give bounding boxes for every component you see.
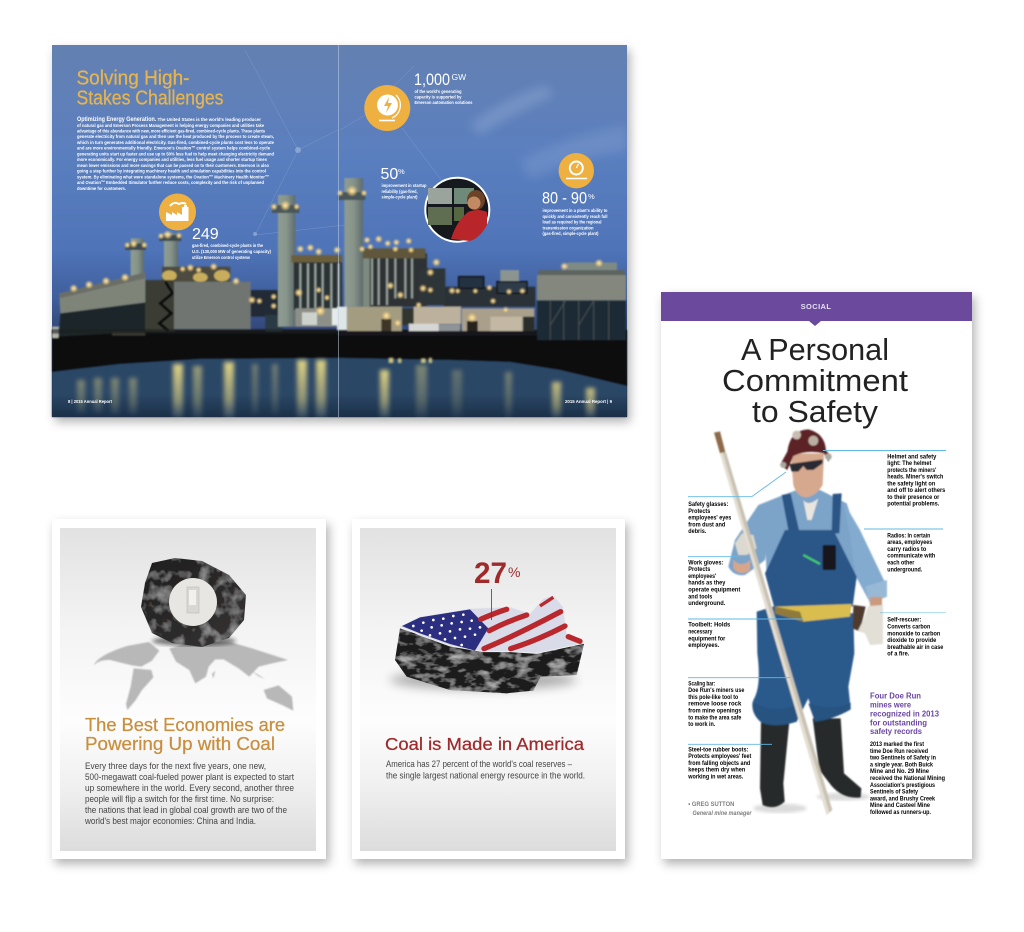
body text: optimizing energy generation: going a step further by integrating machinery health and simulation capabilities into the control [77, 169, 267, 175]
callout: self-rescuer: Self-rescuer: [887, 617, 921, 624]
stat: 1,000 GW [414, 70, 473, 106]
callout: scaling bar: to make the area safe [688, 714, 742, 721]
callout: work gloves: underground. [688, 600, 726, 607]
body text: optimizing energy generation: of natural gas and Emerson Process Management is helping energy companies and utilities take [77, 123, 264, 129]
callout: safety glasses: debris. [688, 528, 707, 535]
card sheet [352, 519, 625, 859]
attribution: • GREG SUTTON [688, 801, 735, 808]
callout: scaling bar: Scaling bar: [688, 680, 715, 687]
photo: miner with scaling bar [714, 429, 887, 815]
callout: safety glasses [688, 501, 732, 535]
callout: scaling bar: remove loose rock [688, 701, 742, 708]
stat: 1,000 GW: Emerson automation solutions [414, 100, 473, 106]
title: Solving High- [76, 68, 190, 90]
callout: self-rescuer [887, 617, 944, 658]
sidebar body text: Sentinels of Safety [870, 789, 918, 796]
body text: 500-megawatt coal-fueled power plant is expected to start [85, 772, 294, 782]
heading: Powering Up with Coal [85, 734, 275, 754]
sidebar body text: Association's prestigious [870, 782, 935, 789]
callout: self-rescuer: Converts carbon [887, 624, 930, 630]
sidebar body text: a single year. Both Buick [870, 761, 933, 768]
callout: work gloves: Work gloves: [688, 559, 723, 566]
callout: scaling bar [688, 680, 745, 728]
panel: coal is made in america card [352, 519, 625, 859]
stat: 249: 249 [192, 226, 219, 243]
stat: 1,000 GW: GW [452, 72, 466, 82]
body text: the nations that lead in global coal growth are two of the [85, 805, 287, 815]
body text: optimizing energy generation [76, 117, 275, 192]
body text: America has 27 percent of the world's coal reserves – [386, 759, 573, 769]
callout: toolbelt: necessary [688, 628, 713, 636]
callout: radios: carry radios to [887, 546, 926, 553]
panel: best economies card [52, 519, 326, 859]
sidebar body text: time Doe Run received [870, 748, 928, 755]
fold line [338, 45, 340, 417]
callout: radios: Radios: In certain [887, 532, 930, 539]
callout: helmet and safety light: Helmet and safety [887, 453, 937, 460]
coal lump shadow [152, 636, 236, 646]
header band [661, 292, 972, 326]
sidebar body text: followed as runners-up. [870, 809, 931, 816]
title: A Personal [741, 332, 889, 367]
callout: safety glasses: employees' eyes [688, 515, 732, 522]
icon: globe with lightning [364, 85, 410, 131]
callout: toolbelt: Toolbelt: Holds [688, 622, 731, 629]
icon: factory [159, 194, 196, 230]
callout: steel-toe rubber boots [687, 746, 752, 780]
stat: 50%: simple-cycle plant) [382, 195, 418, 201]
stat: 249: utilize Emerson control systems [192, 255, 250, 261]
sidebar body text: Mine and No. 29 Mine [870, 768, 929, 775]
callout: safety glasses: Safety glasses: [688, 501, 728, 508]
callout: steel-toe rubber boots: Steel-toe rubber boots: [688, 746, 748, 753]
callout: scaling bar: to work in. [688, 721, 716, 728]
stat: 50%: % [398, 167, 405, 176]
heading: Coal is Made in America [385, 734, 584, 754]
sidebar body text: received the National Mining [870, 775, 945, 782]
title: Commitment [722, 363, 908, 398]
stat: 80 - 90%: % [588, 192, 595, 201]
body text: people will flip a switch for the first time. No surprise: [85, 794, 274, 804]
stat: 27% [474, 557, 520, 620]
stat: 80 - 90%: transmission organization [542, 225, 594, 231]
sidebar body text: Mine and Casteel Mine [870, 802, 930, 809]
callout: self-rescuer: of a fire. [887, 651, 910, 658]
ground and water [52, 330, 627, 417]
callout: radios: areas, employees [887, 539, 933, 546]
stat: 50% [380, 166, 427, 201]
title: Stakes Challenges [76, 88, 224, 110]
body text: optimizing energy generation: system. By eliminating what were standalone systems, the Ovation™ Machinery Health Monitor™ [77, 174, 269, 180]
callout: radios: each other [887, 560, 915, 566]
callout: work gloves: employees' [688, 573, 717, 580]
stat: 27%: 27 [474, 557, 507, 590]
stat: 80 - 90% [542, 189, 608, 237]
callout leader lines [688, 450, 946, 744]
body text: optimizing energy generation: mean lower emissions and more savings that can be passed on to their customers. Emerson is also [77, 163, 269, 169]
purple subheading [870, 691, 940, 736]
body text: up somewhere in the world. Every second, another three [85, 783, 294, 793]
body text: optimizing energy generation: generating units start up faster and use up to 50% less fuel to help meet changing electricity demand [77, 151, 274, 157]
body text: optimizing energy generation: advantage of this abundance with new, more efficient gas-fired, combined-cycle plants. These plants [77, 128, 265, 134]
body text: optimizing energy generation: and Ovation™ Embedded Simulator further reduce costs, complexity and the risk of unplanned [77, 180, 264, 186]
purple subheading: Four Doe Run [870, 691, 921, 700]
callout: radios: underground. [887, 566, 923, 573]
callout: safety glasses: from dust and [688, 521, 725, 528]
callout: helmet and safety light: and off to alert others [887, 487, 946, 494]
page footer left: 8 | 2015 Annual Report [68, 399, 112, 405]
callout: self-rescuer: monoxide to carbon [887, 630, 940, 637]
attribution [688, 801, 752, 817]
sidebar body text: two Sentinels of Safety in [870, 755, 936, 762]
body text: optimizing energy generation: downtime for customers. [77, 186, 127, 192]
callout: helmet and safety light: light: The helmet [887, 460, 932, 467]
coal lump [141, 558, 246, 647]
stat: 1,000 GW: 1,000 [414, 70, 450, 89]
sidebar body text [870, 741, 945, 816]
callout: scaling bar: Doe Run's miners use [688, 687, 745, 694]
plant right half [337, 178, 626, 363]
panel: personal commitment to safety [661, 292, 972, 859]
callout: steel-toe rubber boots: from falling objects and [688, 760, 750, 767]
sidebar body text: award, and Brushy Creek [870, 795, 935, 802]
stat: 80 - 90%: quickly and consistently reach full [542, 214, 608, 220]
callout: work gloves: and tools [688, 593, 713, 600]
callout: self-rescuer: breathable air in case [887, 644, 944, 651]
purple subheading: safety records [870, 727, 923, 736]
spread background photo [52, 45, 627, 417]
stat: 80 - 90%: improvement in a plant's ability to [542, 208, 608, 214]
sky wisps and network lines [245, 50, 627, 236]
callout: helmet and safety light [887, 453, 946, 508]
light switch [169, 578, 217, 626]
page footer right: 2015 Annual Report | 9 [565, 399, 612, 405]
page sheet [661, 292, 972, 859]
coal america map [390, 595, 584, 693]
stat: 80 - 90%: 80 - 90 [542, 189, 587, 207]
callout: self-rescuer: dioxide to provide [887, 637, 937, 644]
stat: 1,000 GW: capacity is supported by [414, 95, 462, 101]
callout: toolbelt: equipment for [688, 635, 726, 642]
title: to Safety [752, 394, 879, 429]
body text: optimizing energy generation: which in turn generates additional electricity. Gas-fired, combined-cycle plants cost less to operate [76, 140, 274, 146]
stat: 1,000 GW: of the world's generating [414, 89, 462, 95]
callout: toolbelt: employees. [688, 642, 720, 649]
callout: toolbelt [688, 622, 731, 649]
callout: helmet and safety light: potential problems. [887, 500, 940, 508]
callout: work gloves: hands as they [688, 580, 726, 587]
stat: 80 - 90%: load as required by the regional [542, 220, 602, 226]
callout: helmet and safety light: to their presence or [887, 494, 940, 501]
body text: the single largest national energy resource in the world. [386, 770, 585, 780]
callout: work gloves: operate equipment [688, 586, 741, 594]
body text [386, 759, 585, 780]
body text: optimizing energy generation: and are more environmentally friendly. Emerson's Ovation™ control system helps combined-cycle [77, 146, 270, 152]
stat: 80 - 90%: (gas-fired, simple-cycle plant) [542, 231, 599, 237]
world map [94, 641, 293, 711]
body text: Every three days for the next five years, one new, [85, 761, 266, 771]
stat: 27%: % [508, 564, 520, 580]
callout: helmet and safety light: protects the miners' [887, 467, 937, 474]
callout: work gloves: Protects [688, 566, 711, 573]
body text: world's best major economies: China and India. [84, 816, 256, 826]
header band: SOCIAL [801, 302, 831, 311]
callout: radios [887, 532, 935, 573]
stat: 50%: improvement in startup [382, 183, 427, 189]
icon: gauge [559, 153, 594, 188]
plant left half [52, 195, 342, 338]
stat: 249: U.S. (130,000 MW of generating capacity) [192, 249, 271, 255]
stat: 249 [192, 226, 271, 261]
purple subheading: for outstanding [870, 719, 927, 728]
photo: operator at screens [425, 178, 489, 242]
callout: helmet and safety light: the safety light on [887, 480, 935, 487]
callout: safety glasses: Protects [688, 508, 711, 515]
card sheet [52, 519, 326, 859]
callout: radios: communicate with [887, 553, 935, 560]
body text: optimizing energy generation: Optimizing Energy Generation. The United States is the world's leading producer [77, 117, 261, 123]
stat: 50%: 50 [380, 166, 398, 183]
heading: The Best Economies are [85, 715, 285, 735]
attribution: General mine manager [692, 810, 752, 817]
card inner gradient [60, 528, 316, 851]
callout: scaling bar: this pole-like tool to [688, 694, 738, 701]
callout: scaling bar: from mine openings [688, 708, 742, 714]
callout: steel-toe rubber boots: Protects employees' feet [688, 753, 752, 760]
sidebar body text: 2013 marked the first [870, 741, 925, 748]
callout: steel-toe rubber boots: keeps them dry when [688, 767, 745, 774]
callout: steel-toe rubber boots: working in wet areas. [687, 774, 744, 780]
callout: work gloves [688, 559, 741, 607]
body text: optimizing energy generation: generate electricity from natural gas and then use the heat produced by the process to create steam, [77, 134, 275, 140]
purple subheading: mines were [870, 700, 912, 709]
callout: helmet and safety light: heads. Miner's switch [887, 474, 943, 480]
panel: power plant spread [52, 45, 627, 417]
stat: 249: gas-fired, combined-cycle plants in the [192, 243, 263, 249]
purple subheading: recognized in 2013 [870, 710, 940, 719]
stat: 50%: reliability (gas-fired, [382, 189, 418, 195]
body text [84, 761, 294, 826]
body text: optimizing energy generation: more economically. For energy companies and utilities, less fuel usage and shorter startup times [77, 157, 267, 163]
card inner gradient [360, 528, 616, 851]
